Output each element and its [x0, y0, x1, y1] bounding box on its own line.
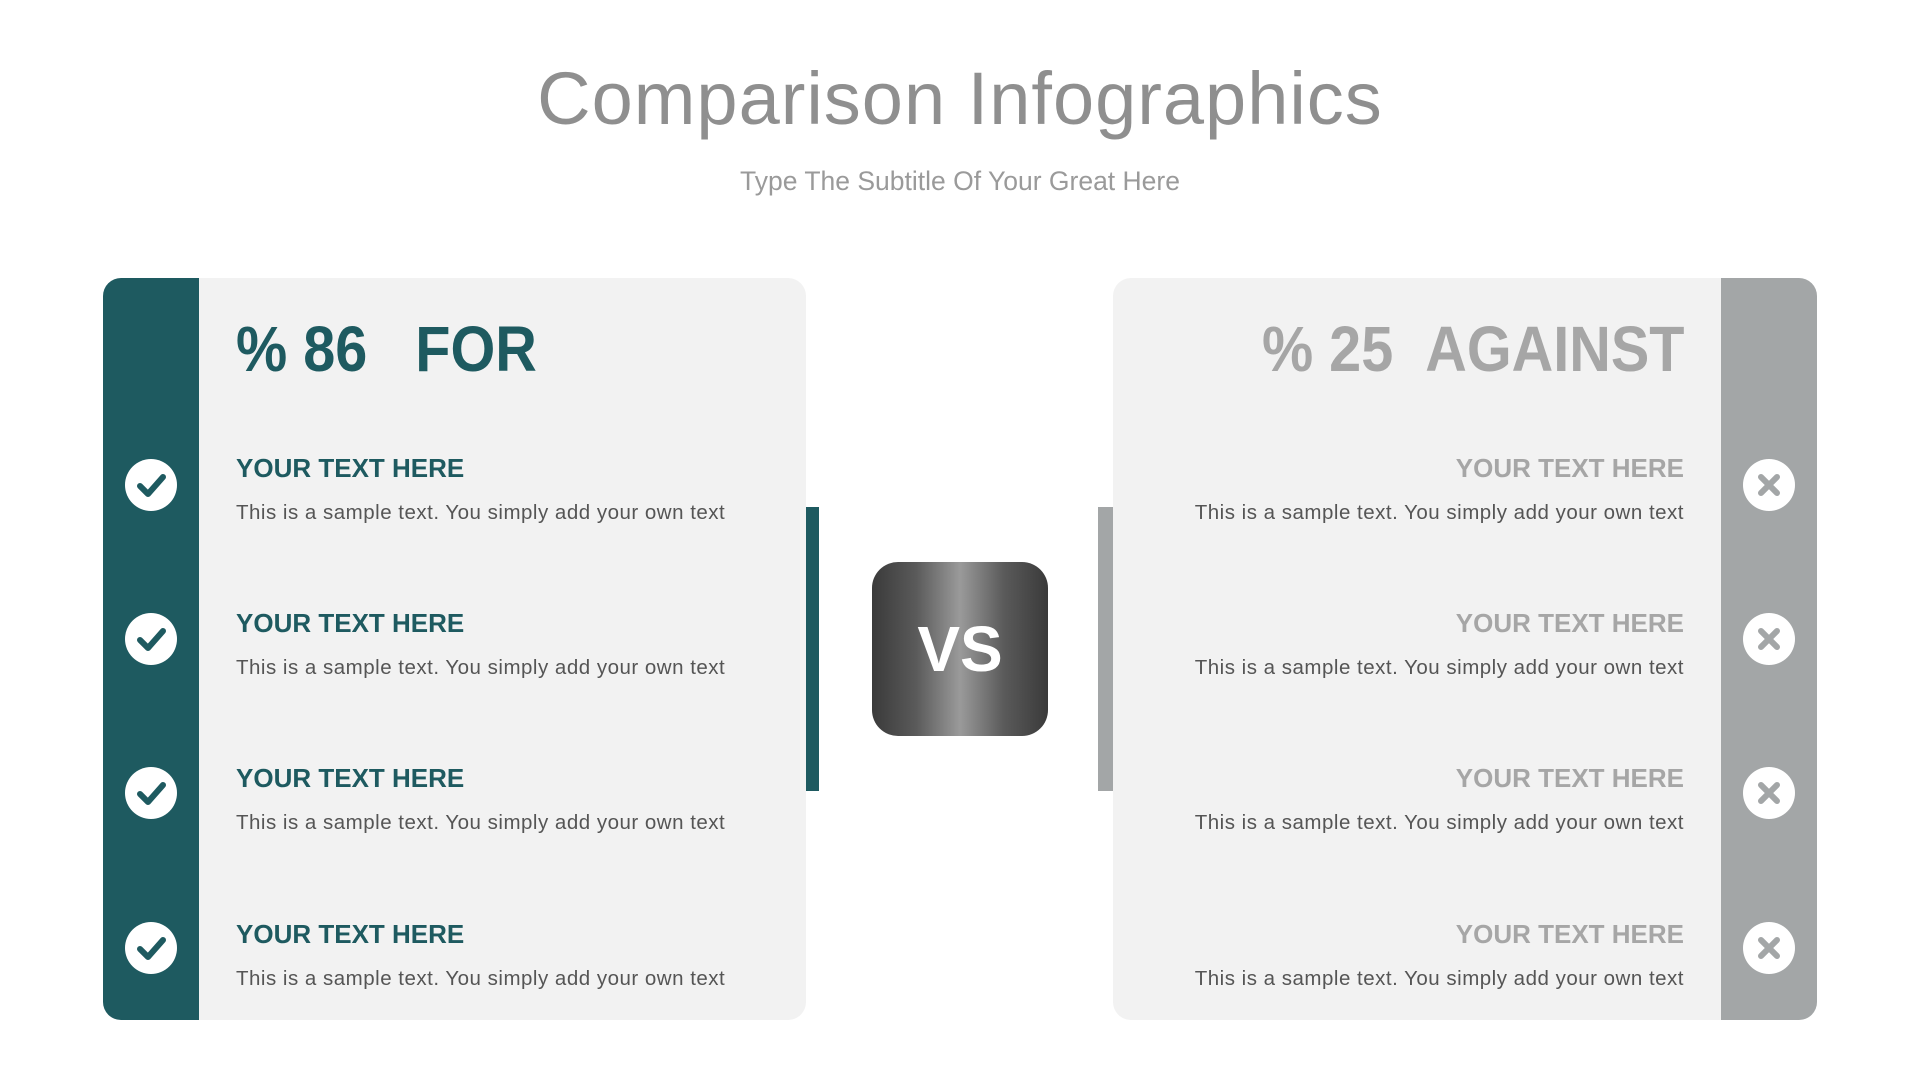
gray side bar	[1721, 278, 1817, 1020]
header: 86 for: % 86 FOR	[236, 313, 537, 385]
items: This is a sample text. You simply add your own text	[236, 811, 725, 834]
items: YOUR TEXT HERE	[236, 763, 464, 793]
items: YOUR TEXT HERE	[1456, 919, 1684, 949]
teal side bar	[103, 278, 199, 1020]
items: This is a sample text. You simply add your own text	[1195, 656, 1684, 679]
title: Comparison Infographics	[537, 57, 1383, 140]
items: YOUR TEXT HERE	[1456, 608, 1684, 638]
items: This is a sample text. You simply add your own text	[236, 656, 725, 679]
items: YOUR TEXT HERE	[236, 919, 464, 949]
panel: against	[1113, 278, 1817, 1020]
x icons	[1743, 459, 1795, 974]
subtitle: Type The Subtitle Of Your Great Here	[740, 166, 1180, 196]
accent bar right	[1098, 507, 1113, 791]
header: 25 against: % 25 AGAINST	[1262, 313, 1684, 385]
panel: for	[103, 278, 806, 1020]
items: YOUR TEXT HERE	[236, 453, 464, 483]
check icons	[125, 459, 177, 974]
items: This is a sample text. You simply add your own text	[1195, 811, 1684, 834]
items: This is a sample text. You simply add your own text	[236, 501, 725, 524]
items: YOUR TEXT HERE	[236, 608, 464, 638]
vs badge: VS	[917, 613, 1003, 685]
items: YOUR TEXT HERE	[1456, 453, 1684, 483]
vs badge	[872, 562, 1048, 736]
accent bar left	[806, 507, 819, 791]
items	[236, 453, 725, 990]
items: This is a sample text. You simply add your own text	[236, 967, 725, 990]
items: This is a sample text. You simply add your own text	[1195, 967, 1684, 990]
items	[1195, 453, 1684, 990]
items: YOUR TEXT HERE	[1456, 763, 1684, 793]
items: This is a sample text. You simply add your own text	[1195, 501, 1684, 524]
